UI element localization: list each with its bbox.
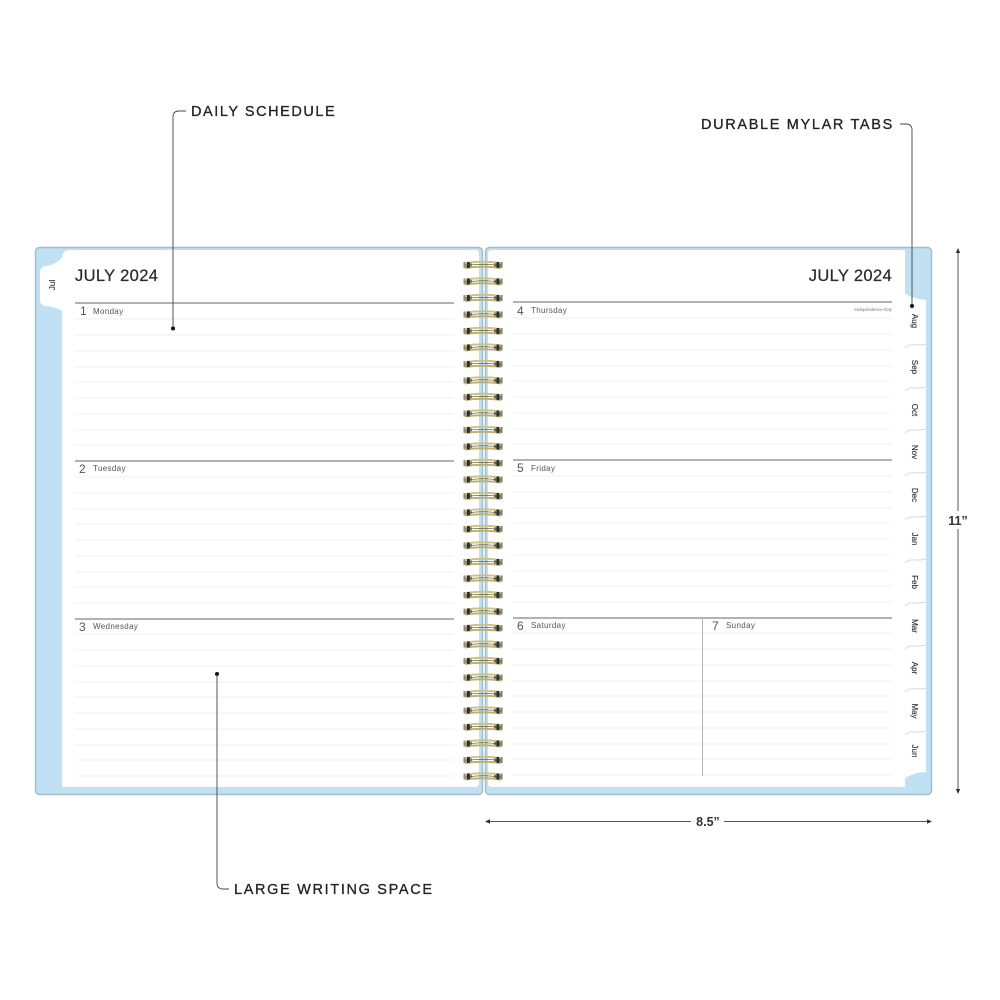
panel: right planner page: [486, 248, 932, 794]
left white page: [62, 250, 479, 787]
day: Wednesday: Wednesday: [93, 622, 138, 631]
day: Monday: [80, 304, 124, 318]
month tabs: Oct: [910, 404, 919, 417]
month tabs: Feb: [910, 575, 919, 589]
note: Independence Day: Independence Day: [854, 307, 893, 312]
month tabs: May: [910, 703, 919, 719]
dimension: height 11 inches: [948, 248, 969, 794]
day: Saturday: 6: [517, 619, 524, 633]
right cover: [486, 248, 932, 794]
day: Wednesday: 3: [79, 620, 86, 634]
day: Friday: Friday: [531, 464, 555, 473]
heading: July 2024 right: JULY 2024: [809, 267, 892, 285]
day: Thursday: Thursday: [531, 306, 567, 315]
dimension: height 11 inches: 11”: [948, 514, 968, 528]
panel: left planner page: [36, 248, 482, 794]
day: Monday: 1: [80, 304, 87, 318]
tab: Jul: Jul: [48, 280, 57, 290]
day: Tuesday: 2: [79, 462, 86, 476]
month tabs: Apr: [910, 662, 919, 675]
day: Thursday: 4: [517, 304, 524, 318]
callout: large writing space: LARGE WRITING SPACE: [234, 882, 434, 898]
callout: large writing space: [215, 672, 434, 898]
heading: July 2024 left: JULY 2024: [75, 267, 158, 285]
month tabs: Nov: [910, 445, 919, 459]
callout: durable mylar tabs: [701, 117, 914, 308]
callout: daily schedule: [171, 104, 336, 330]
dimension: width 8.5 inches: 8.5”: [696, 815, 720, 829]
month tabs: Dec: [910, 488, 919, 502]
day: Friday: 5: [517, 461, 524, 475]
day: Tuesday: Tuesday: [93, 464, 126, 473]
day lines left: [75, 303, 454, 776]
day: Sunday: [712, 619, 755, 633]
day: Saturday: [517, 619, 566, 633]
month tabs: Jun: [910, 745, 919, 757]
right white page: [488, 250, 905, 787]
day: Sunday: Sunday: [726, 621, 755, 630]
day: Thursday: [517, 304, 567, 318]
spiral binding: [464, 262, 502, 780]
month tabs: Mar: [910, 619, 919, 633]
month tabs: Sep: [910, 360, 919, 375]
month tabs: [905, 294, 926, 778]
callout: durable mylar tabs: DURABLE MYLAR TABS: [701, 117, 894, 133]
dimension: width 8.5 inches: [485, 812, 932, 830]
tab: Jul: [40, 256, 63, 312]
day lines right: [513, 302, 892, 776]
day: Tuesday: [79, 462, 126, 476]
day: Sunday: 7: [712, 619, 719, 633]
day: Friday: [517, 461, 555, 475]
day: Monday: Monday: [93, 307, 124, 316]
month tabs: Aug: [910, 314, 919, 328]
month tabs: Jan: [910, 533, 919, 545]
day: Saturday: Saturday: [531, 621, 566, 630]
left cover: [36, 248, 482, 794]
day: Wednesday: [79, 620, 138, 634]
callout: daily schedule: DAILY SCHEDULE: [191, 104, 336, 120]
